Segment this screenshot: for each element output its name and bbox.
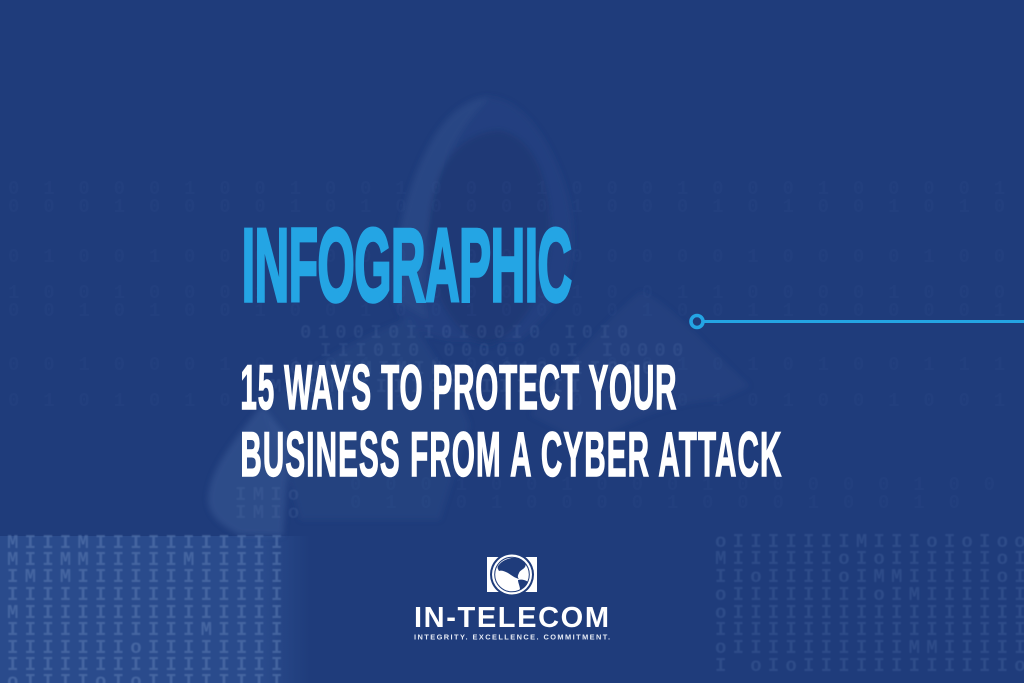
- bottom left code band: IIIIIIIIIIIIIIII: [7, 584, 289, 606]
- binary over figure: [235, 322, 690, 524]
- faint binary rows: 0 1 0 0 1 0 0 0 0 1 0 0 0 1 0 0 1 0: [350, 492, 966, 514]
- logo: in-telecom: [414, 552, 610, 642]
- subtitle: [240, 353, 782, 490]
- bottom left code band: MIIIIIIIIIIIIIII: [7, 602, 289, 624]
- binary over figure: III0I0 00000 0I I0000: [320, 340, 690, 362]
- connector line with ring: [691, 316, 1024, 328]
- binary over figure: IMIo: [235, 484, 305, 506]
- bottom left code band: MIIIMIIIIIIIIIII: [7, 532, 289, 554]
- wordmark: IN-TELECOM: [414, 602, 609, 634]
- faint binary rows: [8, 178, 1024, 514]
- binary over figure: MMIMIIIII0I0IIIIII: [270, 376, 587, 398]
- icon: globe: [487, 552, 537, 596]
- hooded hacker silhouette: [208, 97, 750, 536]
- subtitle: BUSINESS FROM A CYBER ATTACK: [240, 420, 782, 490]
- subtitle: 15 WAYS TO PROTECT YOUR: [240, 353, 677, 423]
- heading: infographic: INFOGRAPHIC: [242, 208, 572, 324]
- bottom left code band: IMIMIIIIIIIIIIII: [7, 566, 289, 588]
- binary over figure: 0100I0II0I00I0 I0I0: [300, 322, 634, 344]
- faint binary rows: 0 0 0 1 0 0 1 0 0 0 1 0 0 0 0 0 1 0 0: [350, 474, 1001, 496]
- bottom left code band: [0, 532, 310, 683]
- faint binary rows: 0 1 0 0 0 1 0 0 1 0 0 1 0 0 0 1 0 0 0 1 0 0 0 1 0 0 0 0 1 0: [8, 178, 1024, 200]
- tagline: INTEGRITY. EXCELLENCE. COMMITMENT.: [414, 632, 610, 642]
- bottom right code band: [715, 531, 1024, 677]
- binary over figure: IMIo: [235, 502, 305, 524]
- binary over figure: 0MMIMIMINo 0010 II000: [290, 358, 660, 380]
- bottom left code band: MIIMMIIIIIMIIIII: [7, 549, 289, 571]
- bottom left code band: IIIIIIIIIIIMIIII: [7, 619, 289, 641]
- bottom left code band: IIIIIIIIIIIIIIII: [7, 654, 289, 676]
- bottom left code band: IIIIIIIoIIIIIIII: [7, 637, 289, 659]
